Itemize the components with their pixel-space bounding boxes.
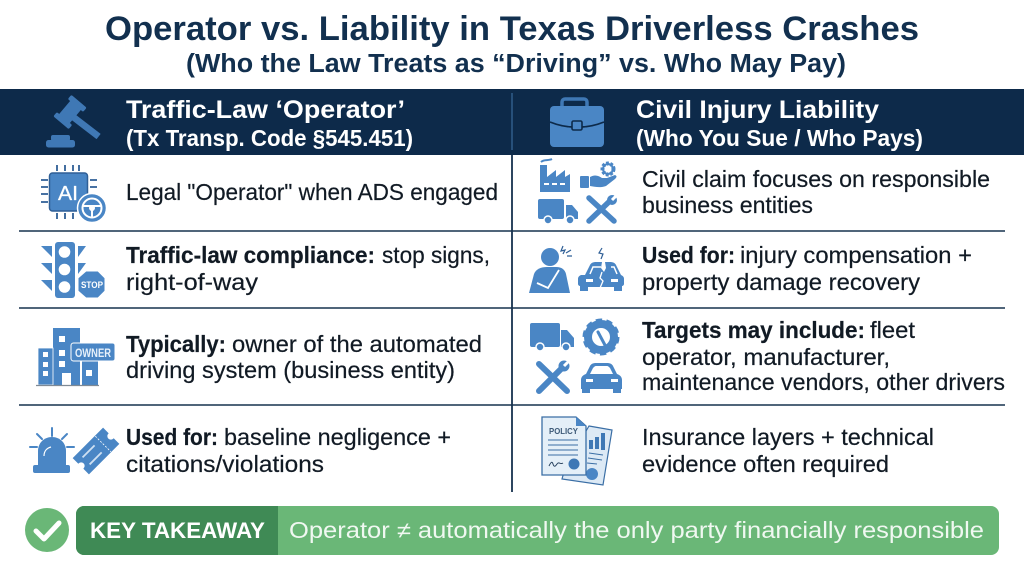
text: insurance layers: Insurance layers + technical [642, 424, 934, 450]
key takeaway banner: Operator ≠ automatically the only party financially responsible [289, 517, 984, 543]
text: targets: fleet [870, 317, 916, 343]
text: compliance: Traffic-law compliance: [126, 242, 375, 268]
icon: factory, hand, truck, tools [538, 159, 617, 224]
text: used for negligence: citations/violations [126, 451, 324, 477]
text: injury compensation: Used for: [642, 242, 735, 268]
heading: traffic-law operator [126, 96, 413, 151]
header band [0, 89, 1024, 155]
key takeaway banner [76, 506, 999, 555]
icon: briefcase [550, 99, 604, 147]
text: typically owner [126, 331, 482, 383]
text: targets: Targets may include: [642, 317, 865, 343]
icon: gavel [46, 95, 100, 148]
icon: policy documents: POLICY [549, 426, 578, 436]
title: Operator vs. Liability in Texas Driverless Crashes [105, 10, 919, 48]
text: injury compensation [642, 242, 972, 295]
icon: traffic light and stop sign: STOP [81, 280, 103, 290]
text: typically owner: driving system (business entity) [126, 357, 455, 383]
key takeaway banner: KEY TAKEAWAY [90, 518, 265, 543]
text: used for negligence [126, 424, 451, 477]
text: civil claim: business entities [642, 192, 813, 218]
heading: traffic-law operator: (Tx Transp. Code §545.451) [126, 125, 413, 151]
text: compliance [126, 242, 490, 295]
text: typically owner: owner of the automated [232, 331, 482, 357]
text: injury compensation: injury compensation + [740, 242, 972, 268]
text: insurance layers [642, 424, 934, 477]
text: used for negligence: baseline negligence + [224, 424, 451, 450]
title: (Who the Law Treats as “Driving” vs. Who May Pay) [186, 50, 846, 78]
icon: check circle [25, 508, 69, 552]
text: compliance: right-of-way [126, 269, 259, 295]
text: civil claim: Civil claim focuses on responsible [642, 166, 990, 192]
icon: siren and ticket [30, 428, 119, 474]
icon: owner building [36, 328, 115, 386]
text: insurance layers: evidence often required [642, 451, 889, 477]
text: injury compensation: property damage recovery [642, 269, 921, 295]
heading: civil injury liability: Civil Injury Liability [636, 96, 879, 124]
text: targets: maintenance vendors, other drivers [642, 369, 1005, 395]
icon: truck, gear, tools, car [530, 321, 622, 393]
icon: AI chip with steering wheel: AI [58, 183, 78, 205]
icon: owner building: OWNER [75, 346, 111, 360]
heading: civil injury liability: (Who You Sue / Who Pays) [636, 125, 923, 151]
heading: civil injury liability [636, 96, 923, 151]
text: targets: operator, manufacturer, [642, 344, 890, 370]
icon: policy documents [542, 417, 612, 485]
icon: AI chip with steering wheel [41, 165, 106, 222]
text: used for negligence: Used for: [126, 424, 218, 450]
text: targets [642, 317, 1005, 395]
table lines [19, 93, 1005, 492]
text: civil claim [642, 166, 990, 218]
text: typically owner: Typically: [126, 331, 226, 357]
text: legal operator: Legal "Operator" when ADS engaged [126, 179, 498, 205]
icon: injured person and crashed car [529, 246, 624, 293]
heading: traffic-law operator: Traffic-Law ‘Operator’ [126, 96, 405, 124]
text: compliance: stop signs, [382, 242, 490, 268]
icon: traffic light and stop sign [41, 242, 105, 298]
title [105, 10, 919, 78]
